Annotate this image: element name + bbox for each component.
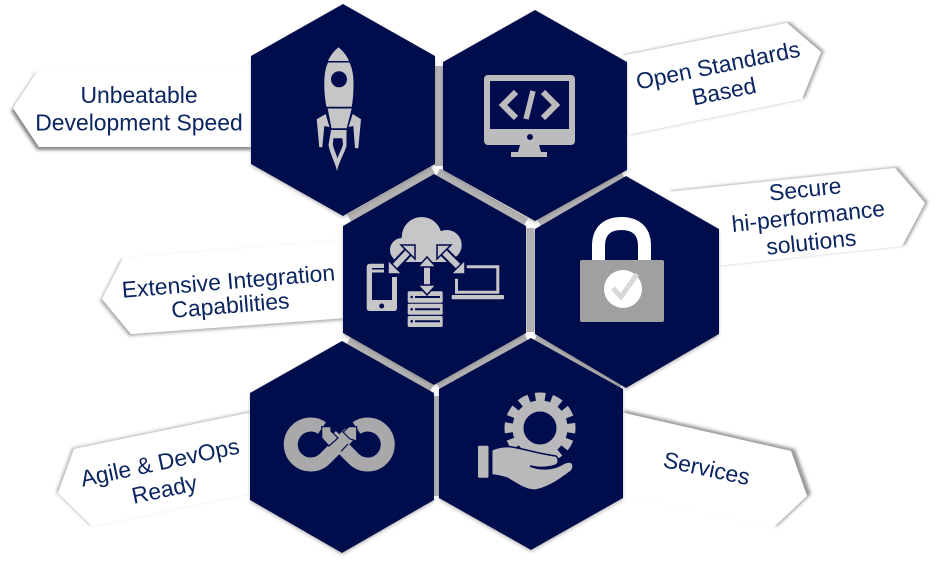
label: Secure hi-performance solutions: solutions bbox=[765, 224, 857, 260]
icon: infinity loop bbox=[291, 425, 388, 465]
label: Unbeatable Development Speed: Development Speed bbox=[35, 110, 243, 136]
icon: padlock bbox=[580, 224, 664, 322]
label: Agile and DevOps Ready bbox=[58, 412, 253, 526]
label: Open Standards Based: Open Standards bbox=[634, 36, 802, 95]
label: Services: Services bbox=[661, 446, 752, 490]
label: Secure hi-performance solutions: hi-performance bbox=[730, 195, 886, 237]
label: Extensive Integration Capabilities: Capabilities bbox=[170, 287, 290, 323]
hexagon: infinity loop bbox=[250, 341, 434, 553]
label: Services bbox=[620, 412, 807, 528]
hexagon: cloud integration bbox=[343, 174, 526, 385]
label: Open Standards Based bbox=[621, 23, 821, 135]
hexagon: services gear and hand bbox=[439, 338, 623, 550]
label: Open Standards Based: Based bbox=[690, 72, 758, 110]
label: Unbeatable Development Speed: Unbeatable bbox=[80, 82, 198, 108]
label: Secure hi-performance solutions bbox=[667, 168, 925, 266]
label: Extensive Integration Capabilities: Extensive Integration bbox=[121, 259, 336, 303]
icon: rocket bbox=[317, 47, 361, 171]
icon: gear in open hand bbox=[478, 398, 573, 490]
hexagon: rocket bbox=[251, 4, 435, 216]
label: Unbeatable Development Speed bbox=[13, 70, 254, 147]
hexagon: padlock bbox=[535, 176, 719, 388]
icon: code monitor bbox=[484, 75, 575, 157]
hexagon: code monitor bbox=[443, 10, 627, 221]
icon: cloud integration bbox=[367, 217, 504, 327]
label: Secure hi-performance solutions: Secure bbox=[768, 172, 843, 206]
label: Extensive Integration Capabilities bbox=[102, 240, 346, 334]
label: Agile and DevOps Ready: Ready bbox=[129, 469, 200, 509]
label: Agile and DevOps Ready: Agile & DevOps bbox=[78, 433, 242, 492]
